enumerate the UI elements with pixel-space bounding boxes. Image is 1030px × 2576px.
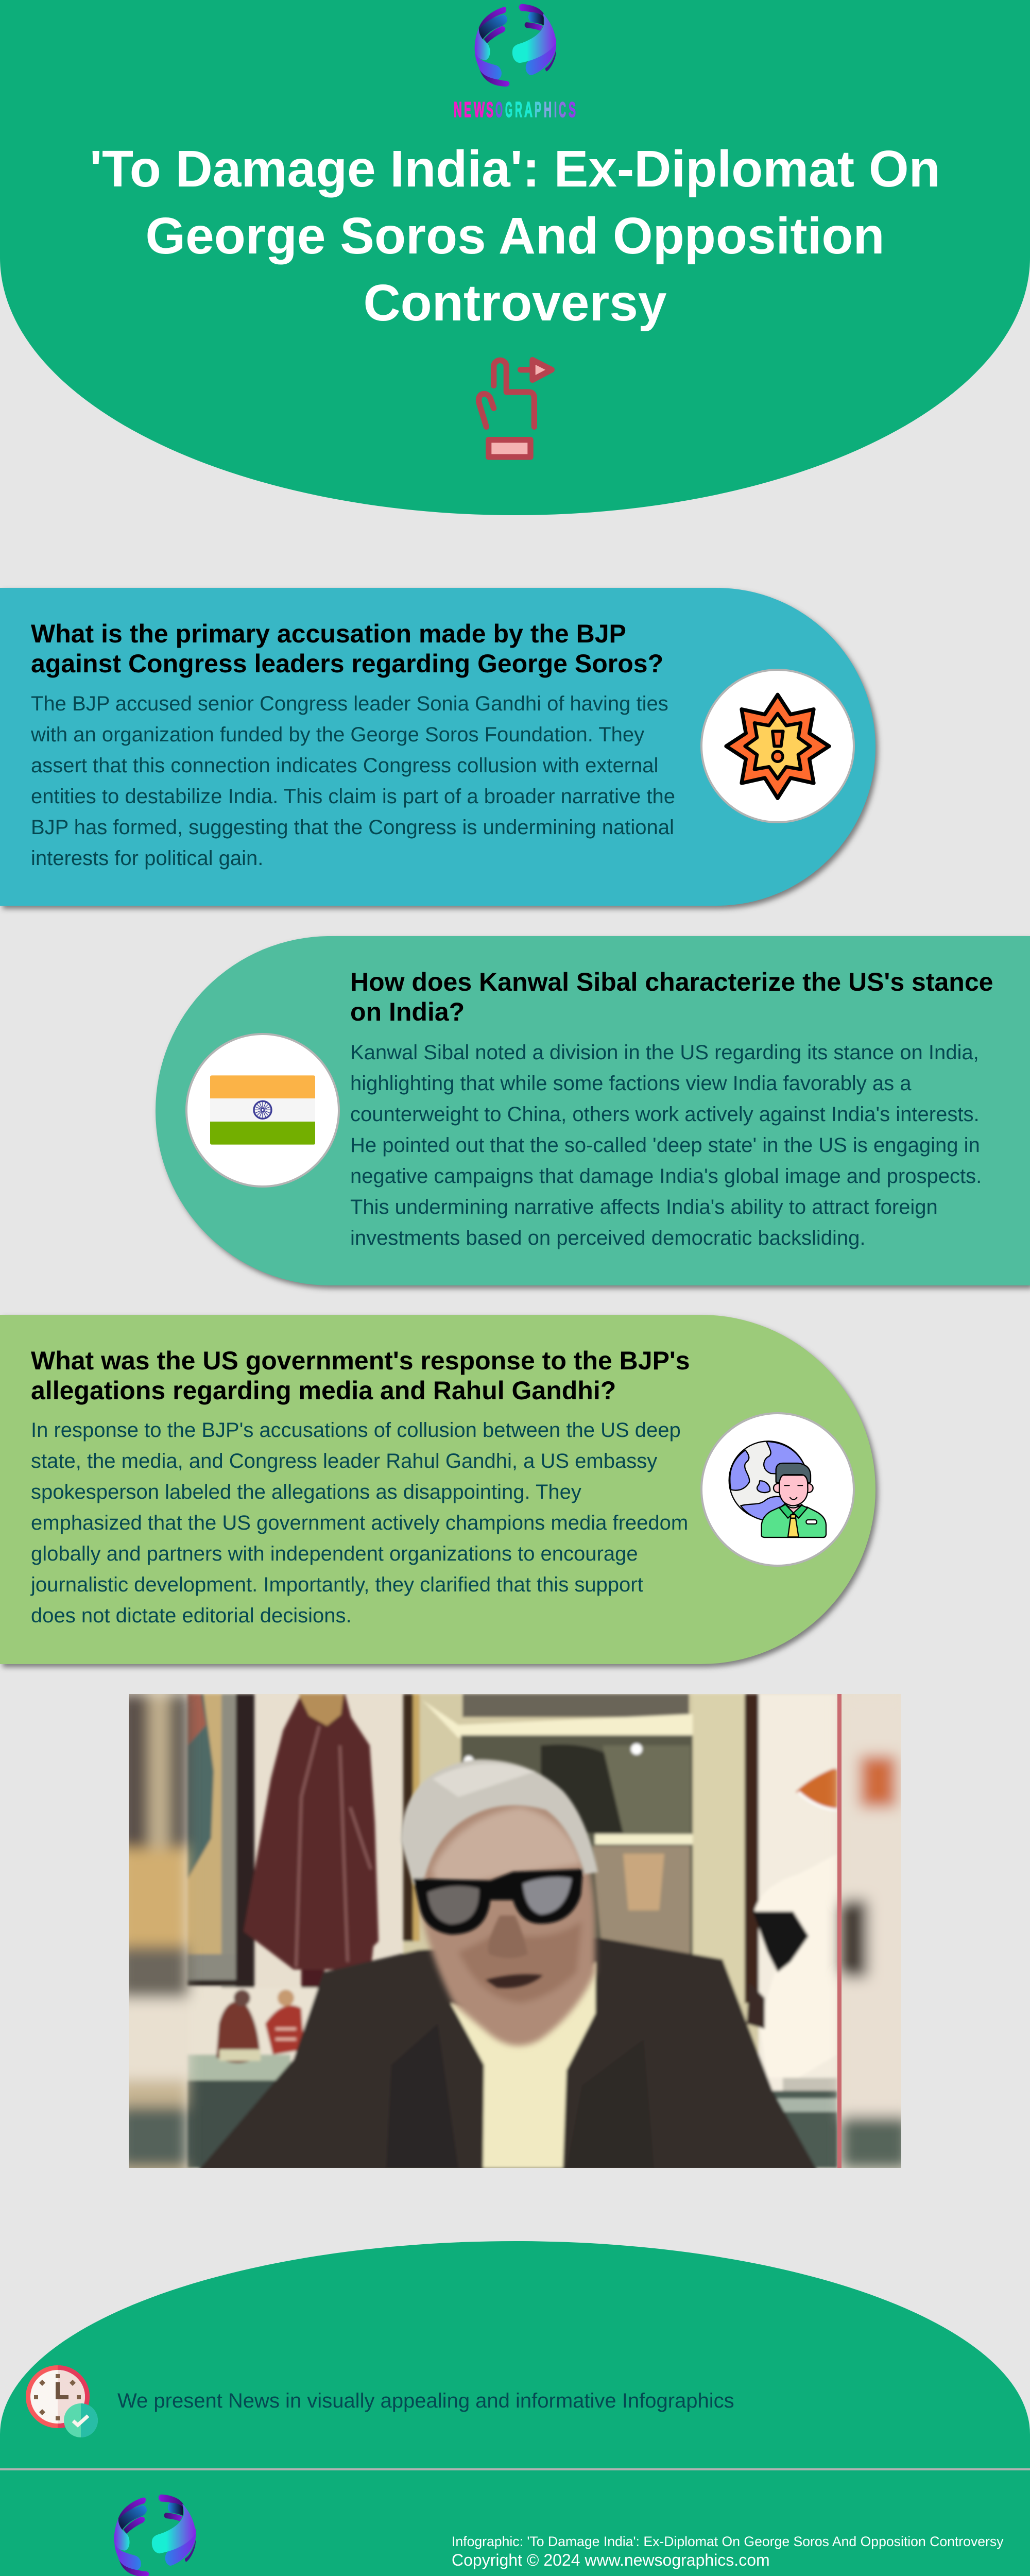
footer credits (452, 2534, 1003, 2569)
logo wordmark: top: E (464, 97, 471, 122)
logo wordmark: top: G (505, 97, 512, 122)
heading: panel 1: against Congress leaders regarding George Soros? (31, 649, 663, 678)
icon: hand pointing with arrow (476, 357, 555, 460)
footer credits: Infographic: 'To Damage India': Ex-Diplomat On George Soros And Opposition Controversy (452, 2534, 1003, 2549)
logo mark: footer (114, 2495, 196, 2576)
icon: clock with check badge (26, 2365, 98, 2437)
header banner (0, 0, 1030, 515)
text: panel 3 (30, 1419, 688, 1627)
heading: panel 3 (31, 1346, 690, 1405)
text: panel 1: entities to destabilize India. This claim is part of a broader narrative the (31, 785, 675, 808)
footer credits: Copyright © 2024 www.newsographics.com (452, 2551, 770, 2569)
text: panel 3: journalistic development. Importantly, they clarified that this support (31, 1573, 643, 1596)
text: panel 3: emphasized that the US government actively champions media freedom (31, 1512, 688, 1534)
logo wordmark: top: S (486, 97, 493, 122)
heading: panel 3: What was the US government's response to the BJP's (31, 1346, 690, 1375)
footer tagline: We present News in visually appealing and informative Infographics (117, 2389, 734, 2412)
heading: panel 1 (31, 619, 663, 678)
icon: India flag in circle (185, 1033, 340, 1188)
text: panel 3: state, the media, and Congress leader Rahul Gandhi, a US embassy (31, 1450, 657, 1472)
logo wordmark: top: O (495, 97, 503, 122)
panel: US government response (0, 1315, 876, 1664)
text: panel 1 (31, 692, 675, 870)
heading: panel 2: How does Kanwal Sibal characterize the US's stance (350, 968, 993, 996)
heading: panel 3: allegations regarding media and Rahul Gandhi? (31, 1376, 616, 1405)
logo wordmark: top: I (554, 97, 557, 122)
text: panel 2: This undermining narrative affects India's ability to attract foreign (350, 1196, 938, 1218)
photo: Kanwal Sibal video still (129, 1694, 901, 2168)
panel: Kanwal Sibal on US stance (156, 936, 1030, 1285)
logo wordmark: top: H (544, 97, 552, 122)
text: panel 1: interests for political gain. (31, 847, 263, 870)
panel: primary accusation (0, 588, 876, 906)
text: panel 2: He pointed out that the so-called 'deep state' in the US is engaging in (350, 1134, 980, 1157)
title: Controversy (363, 274, 667, 332)
text: panel 3: spokesperson labeled the allegations as disappointing. They (31, 1481, 581, 1503)
text: panel 2: negative campaigns that damage India's global image and prospects. (350, 1165, 982, 1188)
logo wordmark: top (454, 97, 576, 122)
heading: panel 2 (350, 968, 993, 1026)
text: panel 2: Kanwal Sibal noted a division in the US regarding its stance on India, (350, 1041, 979, 1064)
logo wordmark: top: R (515, 97, 522, 122)
icon: warning star in circle (700, 669, 855, 823)
logo wordmark: top: N (454, 97, 462, 122)
title: 'To Damage India': Ex-Diplomat On (90, 140, 940, 198)
text: panel 3: In response to the BJP's accusations of collusion between the US deep (31, 1419, 681, 1442)
logo wordmark: top: A (524, 97, 533, 122)
text: panel 2 (350, 1041, 982, 1249)
text: panel 1: assert that this connection indicates Congress collusion with external (31, 754, 658, 777)
text: panel 2: counterweight to China, others work actively against India's interests. (350, 1103, 980, 1126)
text: panel 1: The BJP accused senior Congress leader Sonia Gandhi of having ties (31, 692, 668, 715)
text: panel 1: BJP has formed, suggesting that the Congress is undermining national (31, 816, 674, 839)
logo wordmark: top: W (474, 97, 485, 122)
logo wordmark: top: C (559, 97, 566, 122)
text: panel 2: investments based on perceived democratic backsliding. (350, 1227, 866, 1249)
icon: globe and official in circle (700, 1412, 855, 1567)
logo wordmark: top: S (569, 97, 576, 122)
title: George Soros And Opposition (145, 207, 885, 265)
footer divider (0, 2468, 1030, 2470)
text: panel 2: highlighting that while some factions view India favorably as a (350, 1072, 912, 1095)
footer banner (0, 2241, 1030, 2576)
title (90, 140, 940, 332)
text: panel 1: with an organization funded by the George Soros Foundation. They (31, 723, 644, 746)
text: panel 3: does not dictate editorial decisions. (31, 1604, 352, 1627)
logo mark: top (475, 4, 556, 87)
heading: panel 1: What is the primary accusation made by the BJP (31, 619, 626, 648)
heading: panel 2: on India? (350, 997, 465, 1026)
text: panel 3: globally and partners with independent organizations to encourage (31, 1543, 638, 1565)
logo wordmark: top: P (535, 97, 541, 122)
